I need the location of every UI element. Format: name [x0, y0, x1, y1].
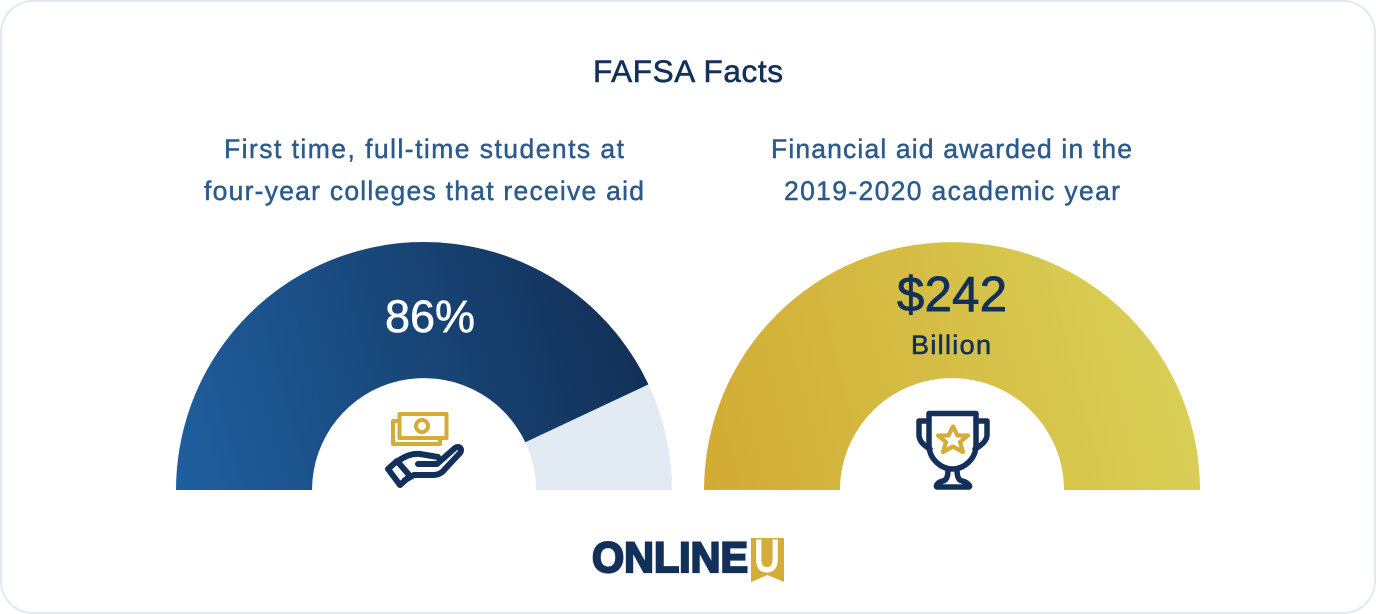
heading: first gauge: First time, full-time students at	[224, 134, 625, 164]
icon: money in hand	[388, 414, 461, 485]
logo ribbon	[751, 538, 784, 582]
chart: 86% gauge	[176, 242, 672, 490]
heading: second gauge: Financial aid awarded in the	[771, 134, 1132, 164]
heading: second gauge: 2019-2020 academic year	[784, 176, 1120, 206]
icon: trophy with star	[919, 414, 987, 487]
heading: first gauge: four-year colleges that receive aid	[204, 176, 644, 206]
title: FAFSA Facts	[593, 53, 783, 89]
label: Billion: Billion	[911, 330, 991, 360]
logo: OnlineU: ONLINE	[592, 534, 748, 582]
value: $242: $242	[897, 268, 1007, 322]
heading: first gauge	[204, 134, 644, 206]
logo letter U: U	[754, 529, 780, 582]
heading: second gauge	[771, 134, 1132, 206]
chart: $242 billion gauge	[704, 242, 1200, 490]
value: 86%: 86%	[385, 291, 475, 342]
